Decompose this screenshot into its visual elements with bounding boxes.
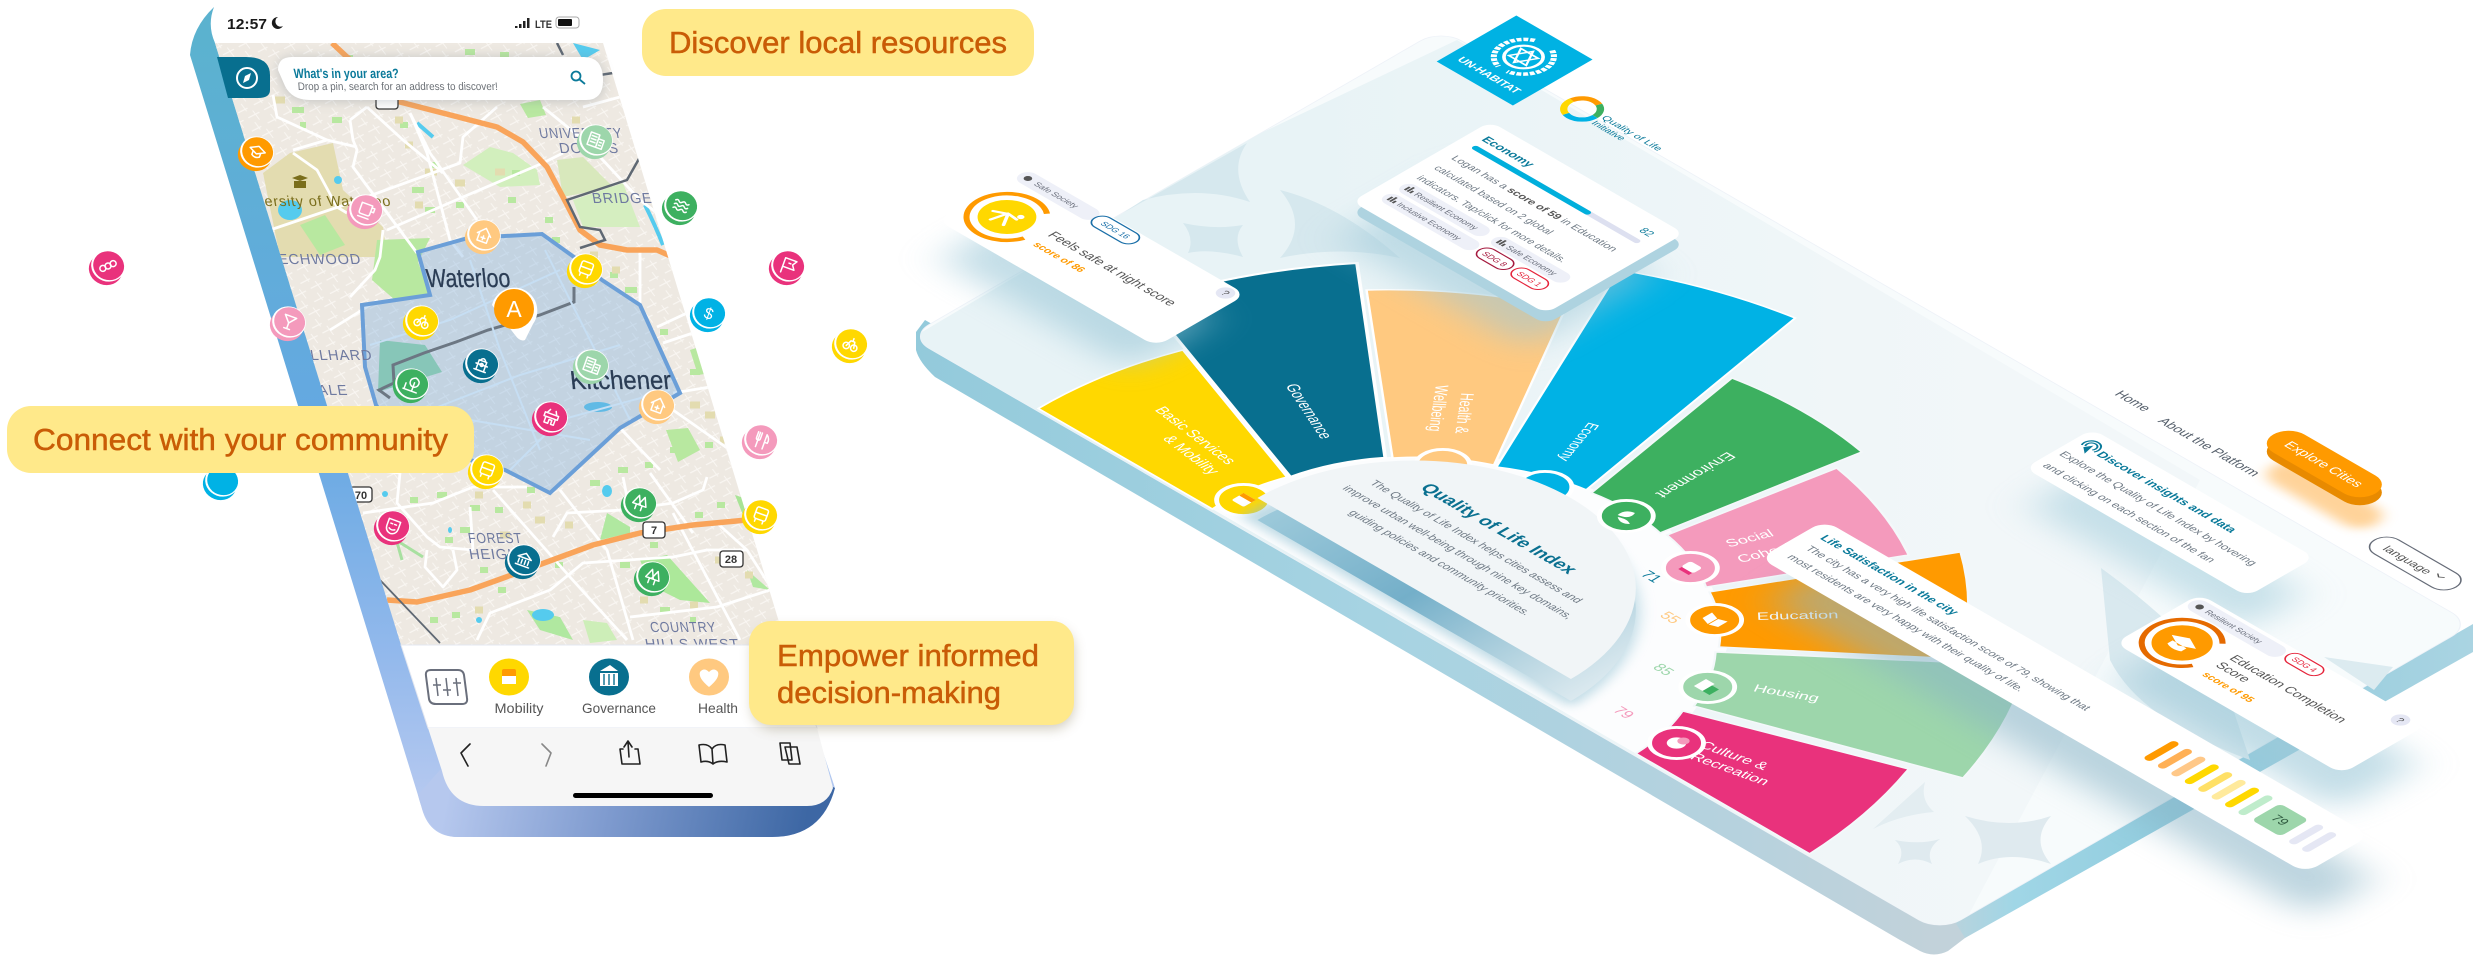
tag: Inclusive Economy [1378,192,1483,252]
panel: mobile phone [84,0,872,837]
wedge label: Environment: Environment [1651,449,1739,500]
filter icon [426,670,467,704]
map place labels: University of Waterloo [231,194,393,210]
fan wedge: Basic Services and Mobility [1038,337,1345,514]
callout: Connect with your community: Connect with your community [33,422,449,457]
wedge label: Health and Wellbeing: Health & [1450,393,1477,434]
card shadow: Discover insights [2026,469,2307,632]
browser bookmarks icon [699,744,727,764]
floating marker: cycling [827,323,872,368]
map place labels: COUNTRY [649,620,718,636]
tab bar background [401,645,817,728]
logo: UN-Habitat: UN-HABITAT [1454,55,1524,96]
tag: Safe Society: Safe Society [1031,180,1082,210]
wedge icon: Social Cohesion [1652,546,1729,590]
wedge label: Basic Services and Mobility [1122,403,1252,478]
tag: SDG 16 [1087,214,1144,246]
status bar background [211,0,603,43]
wedge label: Housing: Housing [1751,682,1822,705]
city boundary [362,234,680,493]
card title: Life Satisfaction in the city [1817,533,1963,617]
resource marker: theatre [369,505,414,550]
municipal divider [379,287,574,398]
button: Explore Cities [2258,426,2391,502]
tag: SDG 4: SDG 4 [2289,656,2320,674]
resource marker: bar [265,301,310,346]
board top face [908,29,2472,932]
description: improve urban well-being through nine key domains, [1339,484,1576,621]
map place labels: BEECHWOOD [256,252,363,268]
score scale: 79 [2267,813,2293,827]
road shields: 28 [725,554,737,566]
search bar: Drop a pin, search for an address to discover! [297,81,498,93]
map place labels: HILLHARD [293,348,374,364]
search bar [278,57,603,101]
road shields: 70 [355,490,367,502]
callout: Empower informed decision-making [749,621,1074,729]
wedge icon: Housing [1670,665,1746,709]
tag: Inclusive Economy: Inclusive Economy [1394,201,1465,242]
rail and municipal line [380,43,640,643]
card: Economy [1352,122,1684,314]
description: indicators. Tap/click for more details. [1413,174,1569,264]
tab: Governance [582,658,656,716]
browser back icon [461,744,470,766]
floating marker: partly hidden blue [198,460,243,505]
browser toolbar background [428,728,833,806]
status signal, LTE and battery [515,17,579,31]
callout: Discover local resources [642,9,1034,76]
road network [270,95,777,640]
board tinted background [921,40,1788,842]
score: 55: 55 [1655,609,1685,626]
map place labels [231,126,741,653]
fan wedge: Environment [1562,374,1868,551]
phone body side [190,7,835,837]
description: and clicking on each section of the fan [2039,461,2218,565]
status signal, LTE and battery: LTE [535,19,552,31]
road shields: 7 [651,525,657,537]
description: calculated based on 2 global [1431,164,1555,236]
resource marker: forest south [629,556,674,601]
description: guiding policies and community priorities. [1345,509,1533,617]
floating marker: flag [764,245,809,290]
card: Life Satisfaction in the city [1760,520,2370,873]
score value: 82 [1636,226,1657,239]
wedge icon: Education [1677,598,1753,642]
panel: Quality of Life Index half-disc [1257,408,1728,679]
wedge label: Basic Services and Mobility: Basic Services [1150,404,1240,467]
tag: Resilient Economy: Resilient Economy [1412,191,1482,232]
floating marker: food [737,419,782,464]
resource marker: cafe [342,189,387,234]
card shadow: Life Satisfaction [1766,564,2376,916]
map place labels: AVALE [298,383,349,399]
fan wedge: Education [1667,500,2053,723]
logo: Quality of Life Initiative: Quality of Life [1598,114,1665,153]
card title: Discover insights and data [2093,449,2241,535]
resource marker: education [233,131,278,176]
white ring behind fan [1205,383,1859,760]
tag: Resilient Society: Resilient Society [2202,608,2266,645]
wedge icon: Culture [1638,721,1715,765]
wedge label: Governance: Governance [1281,382,1336,440]
resource marker: hydrant [458,343,503,388]
status bar time: 12:57 [227,16,267,33]
university icon [292,175,308,188]
resource marker: bus south [463,449,508,494]
nav: About the Platform: About the Platform [2155,415,2264,479]
map pin A [492,288,537,340]
status moon icon [272,17,283,29]
fan wedge: Health and Wellbeing [1234,242,1666,491]
resource marker: health east [634,384,679,429]
card title: Feels safe at night score [1044,229,1180,308]
tag: SDG 1: SDG 1 [1514,270,1545,288]
nav: Home: Home [2111,388,2155,414]
wedge label: Social Cohesion: Cohesion [1734,536,1813,566]
wedge label: Culture and Recreation: Recreation [1687,751,1773,788]
highways [332,43,747,602]
tag: SDG 8: SDG 8 [1479,250,1510,268]
description: The Quality of Life Index helps cities assess and [1367,479,1585,605]
map place labels: UNIVERSITY [538,126,624,142]
callout: Connect with your community [7,406,474,473]
browser forward icon [542,744,551,766]
wedge icon: Economy [1507,465,1583,509]
wedge label: Health and Wellbeing [1387,376,1509,446]
wedge icon: Basic Services [1205,478,1282,522]
description: Explore the Quality of Life Index by hovering [2056,450,2259,568]
logo: UN-Habitat [1437,16,1593,106]
panel: isometric dashboard board [900,29,2473,954]
score ring [934,175,1080,259]
card edge: Economy [1352,132,1684,324]
fan wedge: Social Cohesion [1641,452,1948,630]
compass button [217,57,270,98]
heading: Quality of Life Index: Quality of Life Index [1416,480,1582,577]
tag: Safe Economy: Safe Economy [1503,244,1560,277]
city label: Waterloo: Waterloo [424,263,512,293]
tag: Resilient Economy [1395,182,1494,238]
road shields [350,96,743,567]
card title: Economy [1478,134,1538,169]
button: Explore Cities: Explore Cities [2281,439,2367,489]
card: Feels safe at night score [933,166,1246,346]
score scale [2142,740,2338,853]
parks and land use [263,43,770,643]
icon: touch signal [2077,439,2105,455]
help icon: ? [2392,717,2407,725]
score: 85: 85 [1649,661,1678,678]
floating marker: economy [685,292,730,337]
board right side [1955,624,2473,938]
card score: score of 86 [1030,241,1087,274]
description: Logan has a score of 59 in Education [1448,154,1620,254]
map place labels: FOREST [467,531,524,547]
card title: Education Completion [2226,653,2351,725]
map place labels: HEIGHTS [468,547,541,563]
description [1413,154,1620,274]
button glow [2258,456,2391,534]
tab: Governance: Governance [582,700,656,716]
wedge icon: Health [1405,443,1481,487]
tab: Health [689,658,738,716]
wedge label: Culture and Recreation: Culture & [1696,739,1772,773]
resource marker: forest north [616,482,661,527]
help icon [2387,712,2414,728]
tab: Mobility: Mobility [494,700,544,716]
button edge [2258,434,2391,510]
score: 79: 79 [1609,704,1638,721]
map [200,40,800,653]
floating marker: economy: $ [701,305,716,324]
resource marker: building [572,119,617,164]
fan wedge: Culture and Recreation [1622,675,1933,854]
tab: Health: Health [698,700,738,716]
resource marker: health north [460,214,505,259]
wedge label: Education: Education [1756,609,1839,623]
tag: SDG 4 [2281,651,2328,678]
resource marker: building Kitchener [568,344,613,389]
wedge label: Health and Wellbeing: Wellbeing [1424,385,1452,432]
home indicator [573,793,713,798]
card shadow: Economy [1337,164,1658,349]
card shadow: Feels safe [939,209,1216,369]
score ring [2104,598,2260,688]
small green and tan parcels [292,52,735,620]
logo: Quality of Life Initiative: Initiative [1588,119,1628,142]
score: 71: 71 [1636,568,1666,585]
tag: SDG 1 [1507,266,1553,292]
card score: score of 95 [2199,671,2256,704]
wedge label: Basic Services and Mobility: & Mobility [1158,433,1224,477]
map place labels: BRIDGEPORT [591,191,697,207]
phone bottom edge [418,770,835,837]
resource marker: market [527,396,572,441]
logo: Quality of Life Initiative [1556,94,1670,160]
wedge label: Social Cohesion: Social [1723,527,1777,550]
fan wedge: Governance [1065,221,1540,495]
fan wedge: Housing [1658,569,2093,820]
inner-city streets [370,250,670,470]
wedge icon: Environment [1588,494,1664,538]
browser share icon [620,741,640,764]
description: The city has a very high life satisfaction score of 79, showing that [1802,544,2093,713]
half-disc side [1257,430,1728,701]
tag: SDG 8 [1472,246,1518,272]
callout: Empower informed decision-making: Empower informed [777,638,1039,673]
tag: Resilient Society [2183,598,2291,660]
map place labels: HILLS WEST [644,637,741,653]
callout: Empower informed decision-making: decision-making [777,675,1001,710]
tag: Safe Society [1012,170,1104,222]
tab: Mobility [489,658,544,716]
resource marker: water [657,185,702,230]
wedge label: Culture and Recreation [1678,732,1789,796]
card: Education Completion Score [2104,591,2427,777]
wedge label: Social Cohesion [1710,514,1819,577]
floating marker: culture [84,245,129,290]
browser tabs icon [780,743,800,764]
description: most residents are very happy with their quality of life. [1784,553,2027,694]
tag: SDG 16: SDG 16 [1098,220,1133,240]
city label: Kitchener: Kitchener [568,365,673,395]
card: Discover insights and data [2025,429,2315,596]
map pin A: A [506,296,522,322]
tag: Safe Economy [1487,234,1574,285]
board left side [916,320,1990,954]
half-disc shadow [1240,420,1736,707]
help icon: ? [1217,289,1232,298]
fan wedge: Economy [1387,243,1840,504]
resource marker: cycling [398,300,443,345]
wedge label: Economy: Economy [1555,421,1603,463]
search bar: What's in your area? [293,66,399,81]
language selector: language [2379,545,2434,576]
help icon [1212,285,1239,301]
map place labels: DOWNS [558,141,620,157]
card title: Score [2212,660,2255,684]
card shadow: Education Completion [2112,634,2420,812]
resource marker: city hall [500,539,545,584]
language selector [2362,533,2468,594]
resource marker: bus east [737,494,782,539]
background watermark [1123,143,2393,864]
progress bar [1470,145,1642,244]
callout: Discover local resources: Discover local resources [669,25,1007,60]
resource marker: bus north [562,248,607,293]
resource marker: park [388,363,433,408]
